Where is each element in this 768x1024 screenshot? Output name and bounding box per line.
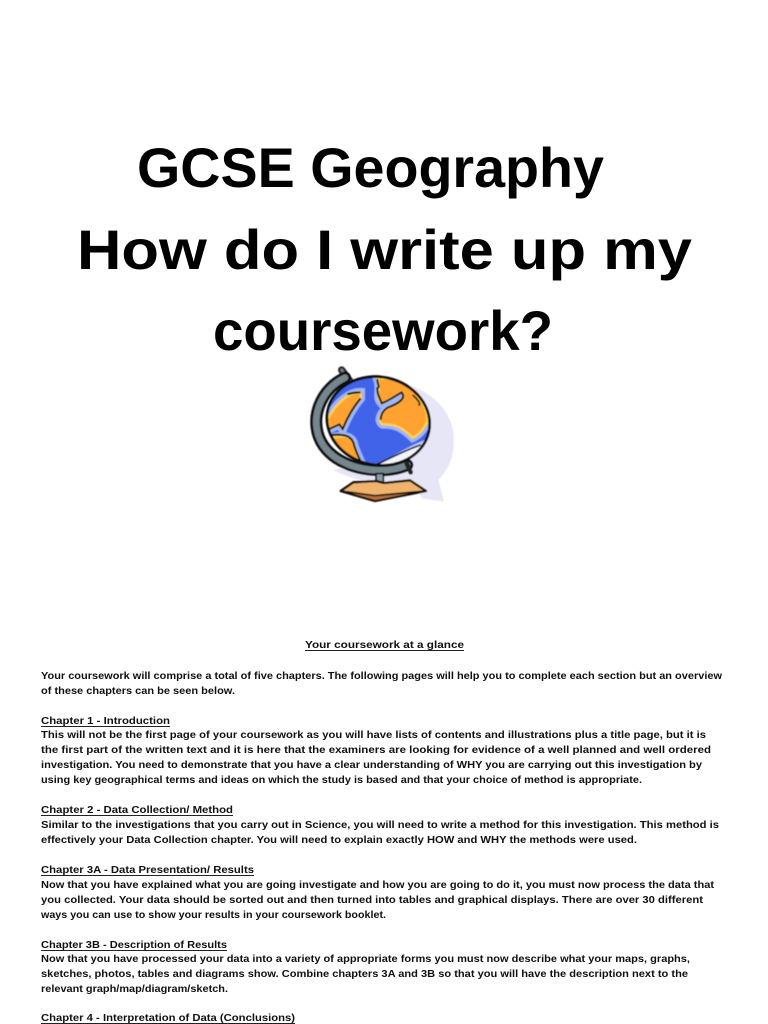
section heading: your coursework at a glance: Your coursework at a glance [305, 639, 464, 651]
text block: chapter 2 [41, 804, 719, 846]
title [77, 136, 692, 362]
text block: chapter 3B: sketches, photos, tables and diagrams show. Combine chapters 3A and 3B so that you will have the description next to the [41, 968, 688, 980]
text block: chapter 1: This will not be the first page of your coursework as you will have lists of contents and illustrations plus a title page, but it is [41, 729, 706, 741]
text block: chapter 1: Chapter 1 - Introduction [41, 715, 170, 727]
icon: globe [316, 367, 454, 502]
text block: chapter 1: using key geographical terms and ideas on which the study is based and that your choice of method is appropriate. [41, 774, 642, 786]
infographic page [41, 146, 722, 1024]
title: GCSE Geography [137, 136, 604, 199]
text block: chapter 3A: Chapter 3A - Data Presentation/ Results [41, 864, 254, 876]
text block: chapter 1: investigation. You need to demonstrate that you have a clear understanding of WHY you are carrying out this investigation by [41, 759, 702, 771]
text block: chapter 2: Chapter 2 - Data Collection/ Method [41, 804, 233, 816]
text block: chapter 3B: relevant graph/map/diagram/sketch. [41, 983, 228, 995]
title: coursework? [213, 299, 553, 362]
text block: chapter 3A: ways you can use to show your results in your coursework booklet. [40, 909, 386, 921]
text block: chapter 3B: Now that you have processed your data into a variety of appropriate forms you must now describe what your maps, graphs, [41, 953, 690, 965]
text block: overview: Your coursework will comprise a total of five chapters. The following pages will help you to complete each section but an overview [41, 670, 723, 682]
text block: chapter 2: Similar to the investigations that you carry out in Science, you will need to write a method for this investigation. This method is [41, 819, 719, 831]
text block: chapter 1: the first part of the written text and it is here that the examiners are looking for evidence of a well planned and well ordered [41, 744, 711, 756]
text block: chapter 1 [41, 715, 711, 786]
text block: chapter 3A: Now that you have explained what you are going investigate and how you are going to do it, you must now process the data that [41, 879, 715, 891]
title: How do I write up my [77, 218, 692, 281]
text block: chapter 3A: you collected. Your data should be sorted out and then turned into tables and graphical displays. There are over 30 different [41, 894, 704, 906]
text block: overview: of these chapters can be seen below. [41, 685, 235, 697]
text block: overview [41, 670, 723, 697]
text block: chapter 3A [40, 864, 715, 921]
text block: chapter 3B [41, 939, 690, 995]
text block: chapter 3B: Chapter 3B - Description of Results [41, 939, 227, 951]
text block: chapter 2: effectively your Data Collection chapter. You will need to explain exactly HOW and WHY the methods were used. [41, 834, 637, 846]
text block: chapter 4 heading: Chapter 4 - Interpretation of Data (Conclusions) [41, 1012, 295, 1024]
